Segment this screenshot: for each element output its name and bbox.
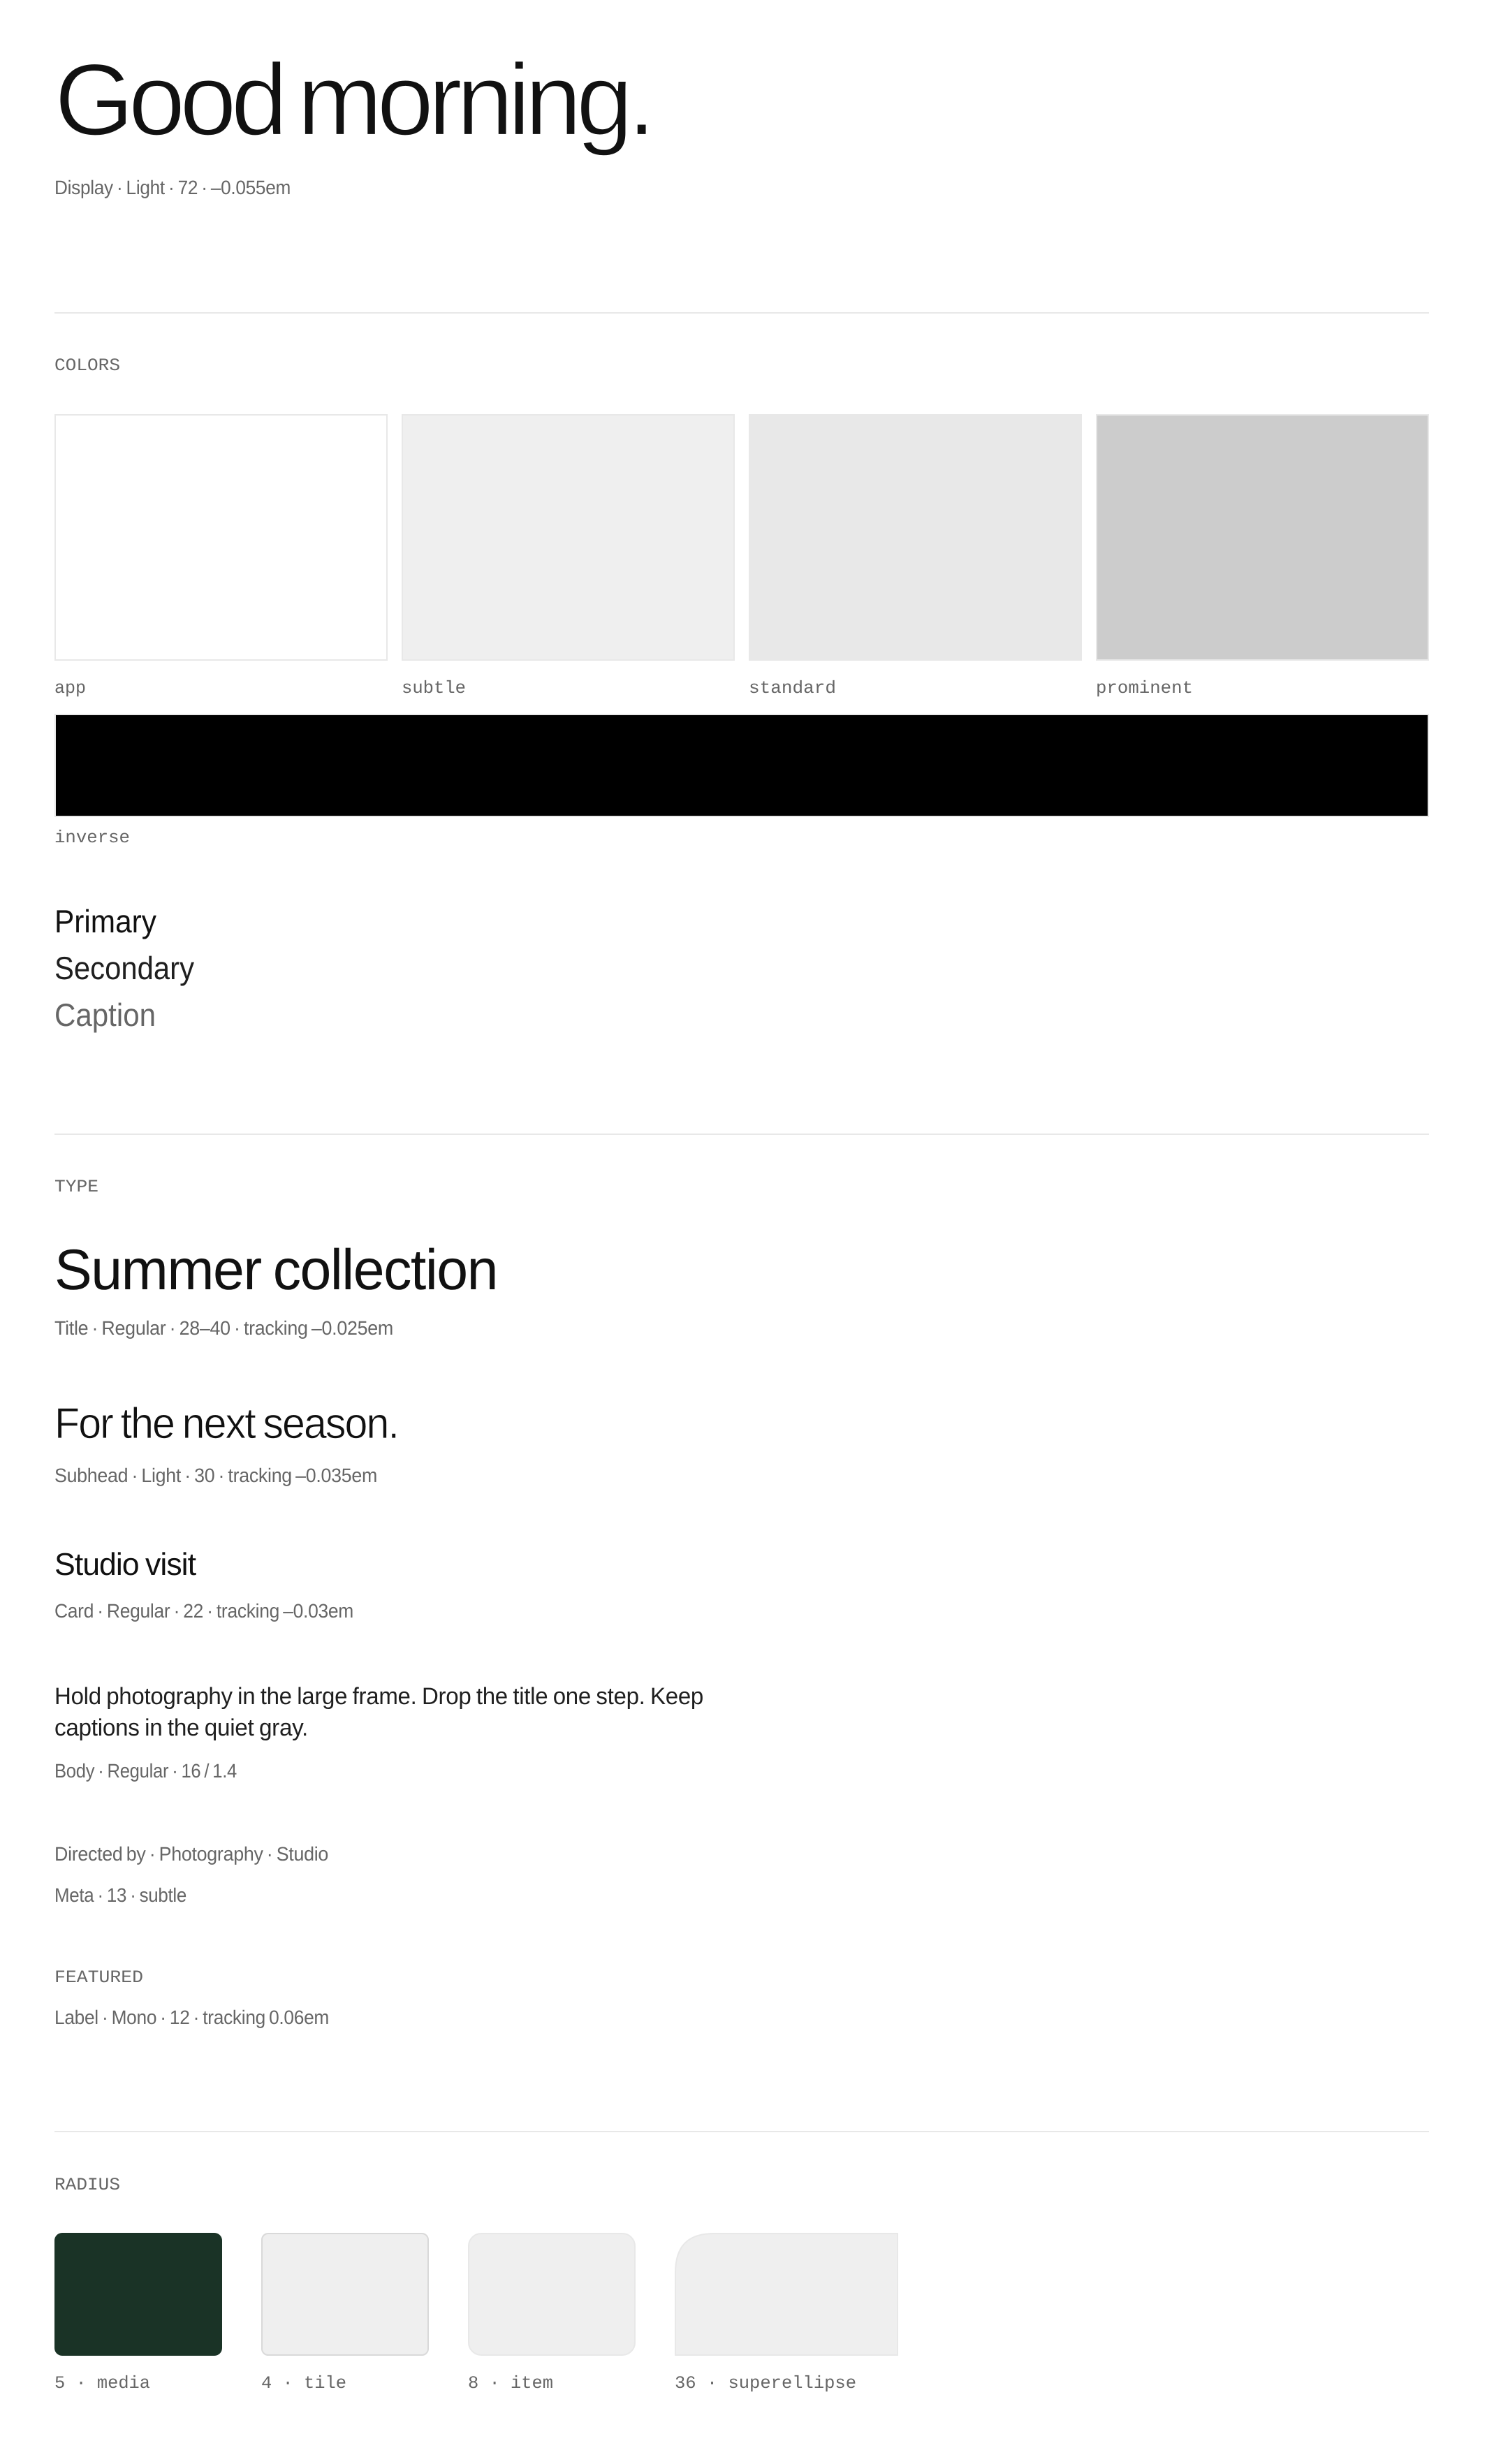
sample: body: captions in the quiet gray. xyxy=(54,1715,308,1741)
label caption: Label · Mono · 12 · tracking 0.06em xyxy=(54,2007,329,2028)
card caption: Card · Regular · 22 · tracking –0.03em xyxy=(54,1600,353,1622)
radius tile: media xyxy=(54,2233,222,2356)
swatch label: prominent: prominent xyxy=(1096,678,1193,698)
swatch: prominent xyxy=(1097,415,1428,660)
sample: card: Studio visit xyxy=(54,1546,196,1582)
sample: subhead: For the next season. xyxy=(54,1400,398,1448)
radius heading: RADIUS xyxy=(54,2175,120,2195)
radius tile: item xyxy=(469,2234,635,2355)
swatch: standard xyxy=(749,415,1081,660)
body caption: Body · Regular · 16 / 1.4 xyxy=(54,1760,237,1782)
swatch label: app: app xyxy=(54,678,86,698)
swatch label: standard: standard xyxy=(749,678,836,698)
swatch label: subtle: subtle xyxy=(402,678,466,698)
swatch: app xyxy=(55,415,387,660)
section: radius xyxy=(54,2175,898,2393)
sample: title: Summer collection xyxy=(54,1238,497,1302)
sample: meta: Directed by · Photography · Studio xyxy=(54,1843,328,1865)
display caption: Display · Light · 72 · –0.055em xyxy=(54,177,291,198)
swatch: inverse xyxy=(55,714,1428,816)
colors heading: COLORS xyxy=(54,355,120,376)
type heading: TYPE xyxy=(54,1177,98,1197)
text color: secondary: Secondary xyxy=(54,950,194,986)
section: display heading xyxy=(54,43,650,198)
sample: label: FEATURED xyxy=(54,1967,143,1988)
radius tile: superellipse xyxy=(675,2234,898,2355)
section: colors xyxy=(54,355,1428,1033)
title caption: Title · Regular · 28–40 · tracking –0.025em xyxy=(54,1317,393,1339)
meta caption: Meta · 13 · subtle xyxy=(54,1884,186,1906)
subhead caption: Subhead · Light · 30 · tracking –0.035em xyxy=(54,1465,377,1486)
sample: body: Hold photography in the large frame. Drop the title one step. Keep xyxy=(54,1683,703,1710)
radius label: media: 5 · media xyxy=(54,2373,150,2393)
radius tile: tile xyxy=(262,2234,428,2355)
text color: caption: Caption xyxy=(54,997,156,1033)
radius label: item: 8 · item xyxy=(468,2373,553,2393)
title: Good morning. xyxy=(54,43,650,156)
radius label: tile: 4 · tile xyxy=(261,2373,346,2393)
section: type xyxy=(54,1177,703,2028)
sample: body xyxy=(54,1683,703,1741)
swatch label: inverse: inverse xyxy=(54,828,130,848)
radius label: superellipse: 36 · superellipse xyxy=(675,2373,856,2393)
swatch: subtle xyxy=(402,415,734,660)
text color: primary: Primary xyxy=(54,903,156,939)
